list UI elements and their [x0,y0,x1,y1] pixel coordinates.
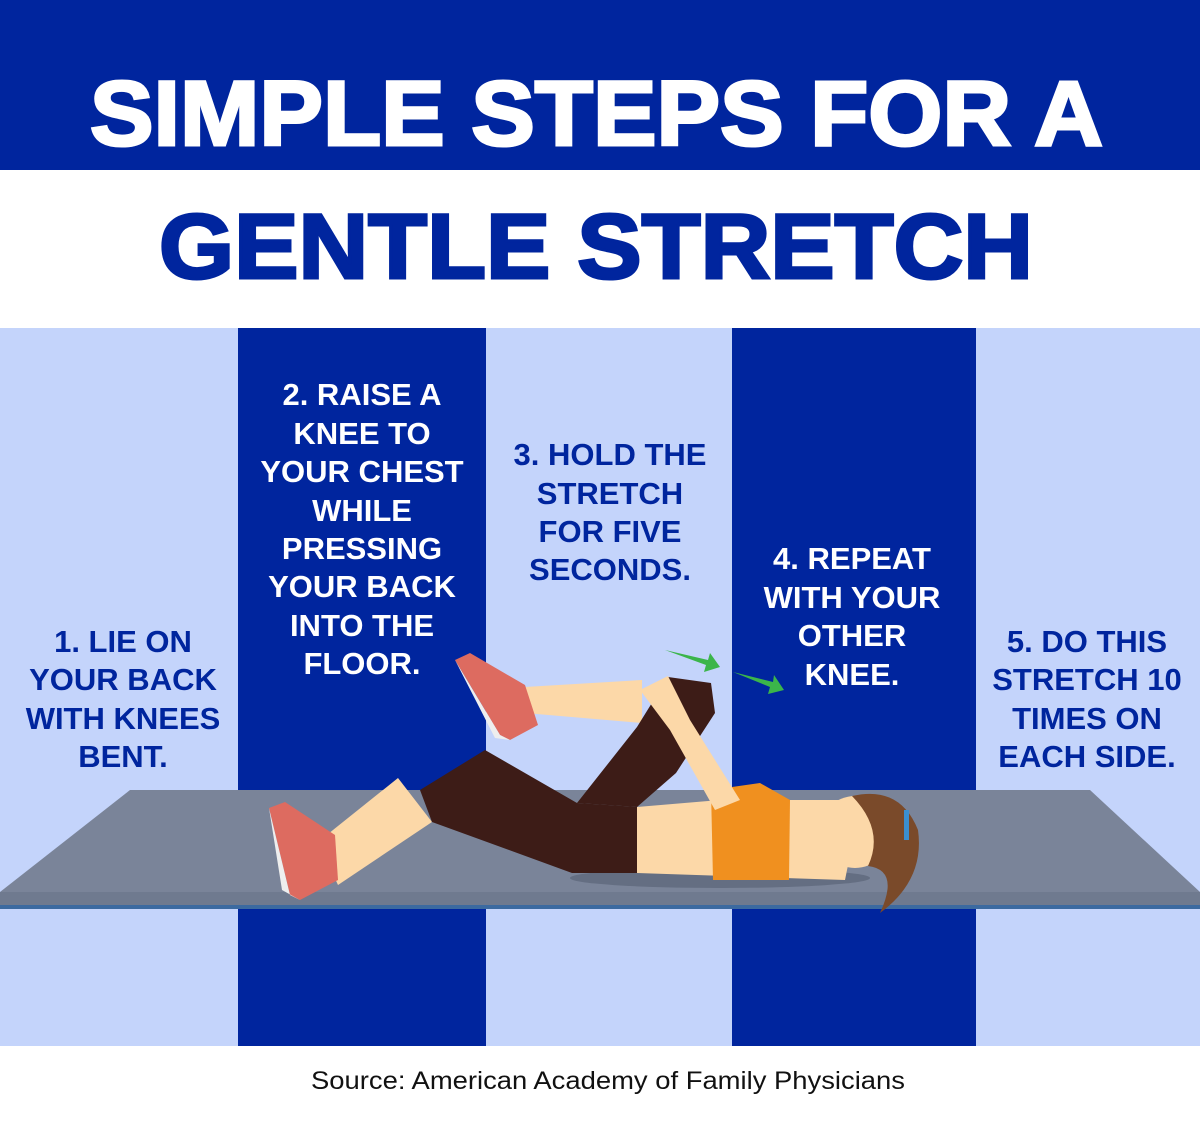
step 1 text: WITH KNEES [26,701,220,736]
step 1 text: 1. LIE ON [54,624,192,659]
column stripes [0,328,1200,1046]
step 2 text: PRESSING [282,531,442,566]
step 1 text: BENT. [78,739,168,774]
step 1 text: YOUR BACK [29,662,217,697]
step 2 text [260,377,464,681]
step 2 text: FLOOR. [303,646,421,681]
illustration: woman stretching [269,653,919,913]
step 2 text: INTO THE [290,608,434,643]
step 2 text: YOUR BACK [268,569,456,604]
step 4 text: OTHER [798,618,906,653]
title band [0,0,1200,170]
step 3 text: STRETCH [537,476,683,511]
step 4 text: KNEE. [805,657,899,692]
step 3 text: 3. HOLD THE [514,437,706,472]
source text: Source: American Academy of Family Physicians [311,1067,905,1095]
step 3 text: FOR FIVE [539,514,681,549]
step 2 text: WHILE [312,493,412,528]
step 5 text: TIMES ON [1012,701,1162,736]
title line 1: SIMPLE STEPS FOR A [90,63,1103,165]
step 2 text: 2. RAISE A [282,377,442,412]
step 3 text: SECONDS. [529,552,691,587]
step 5 text: 5. DO THIS [1007,624,1167,659]
step 4 text [764,541,940,692]
step 2 text: KNEE TO [293,416,431,451]
exercise mat [0,790,1200,909]
step 3 text [514,437,706,587]
step 5 text: EACH SIDE. [998,739,1176,774]
step 5 text [992,624,1182,774]
step 4 text: WITH YOUR [764,580,940,615]
step 5 text: STRETCH 10 [992,662,1182,697]
step 2 text: YOUR CHEST [260,454,464,489]
step 4 text: 4. REPEAT [773,541,931,576]
step 1 text [26,624,220,774]
title line 2: GENTLE STRETCH [159,196,1033,298]
arrow 2 [733,672,784,694]
arrow 1 [665,650,720,672]
